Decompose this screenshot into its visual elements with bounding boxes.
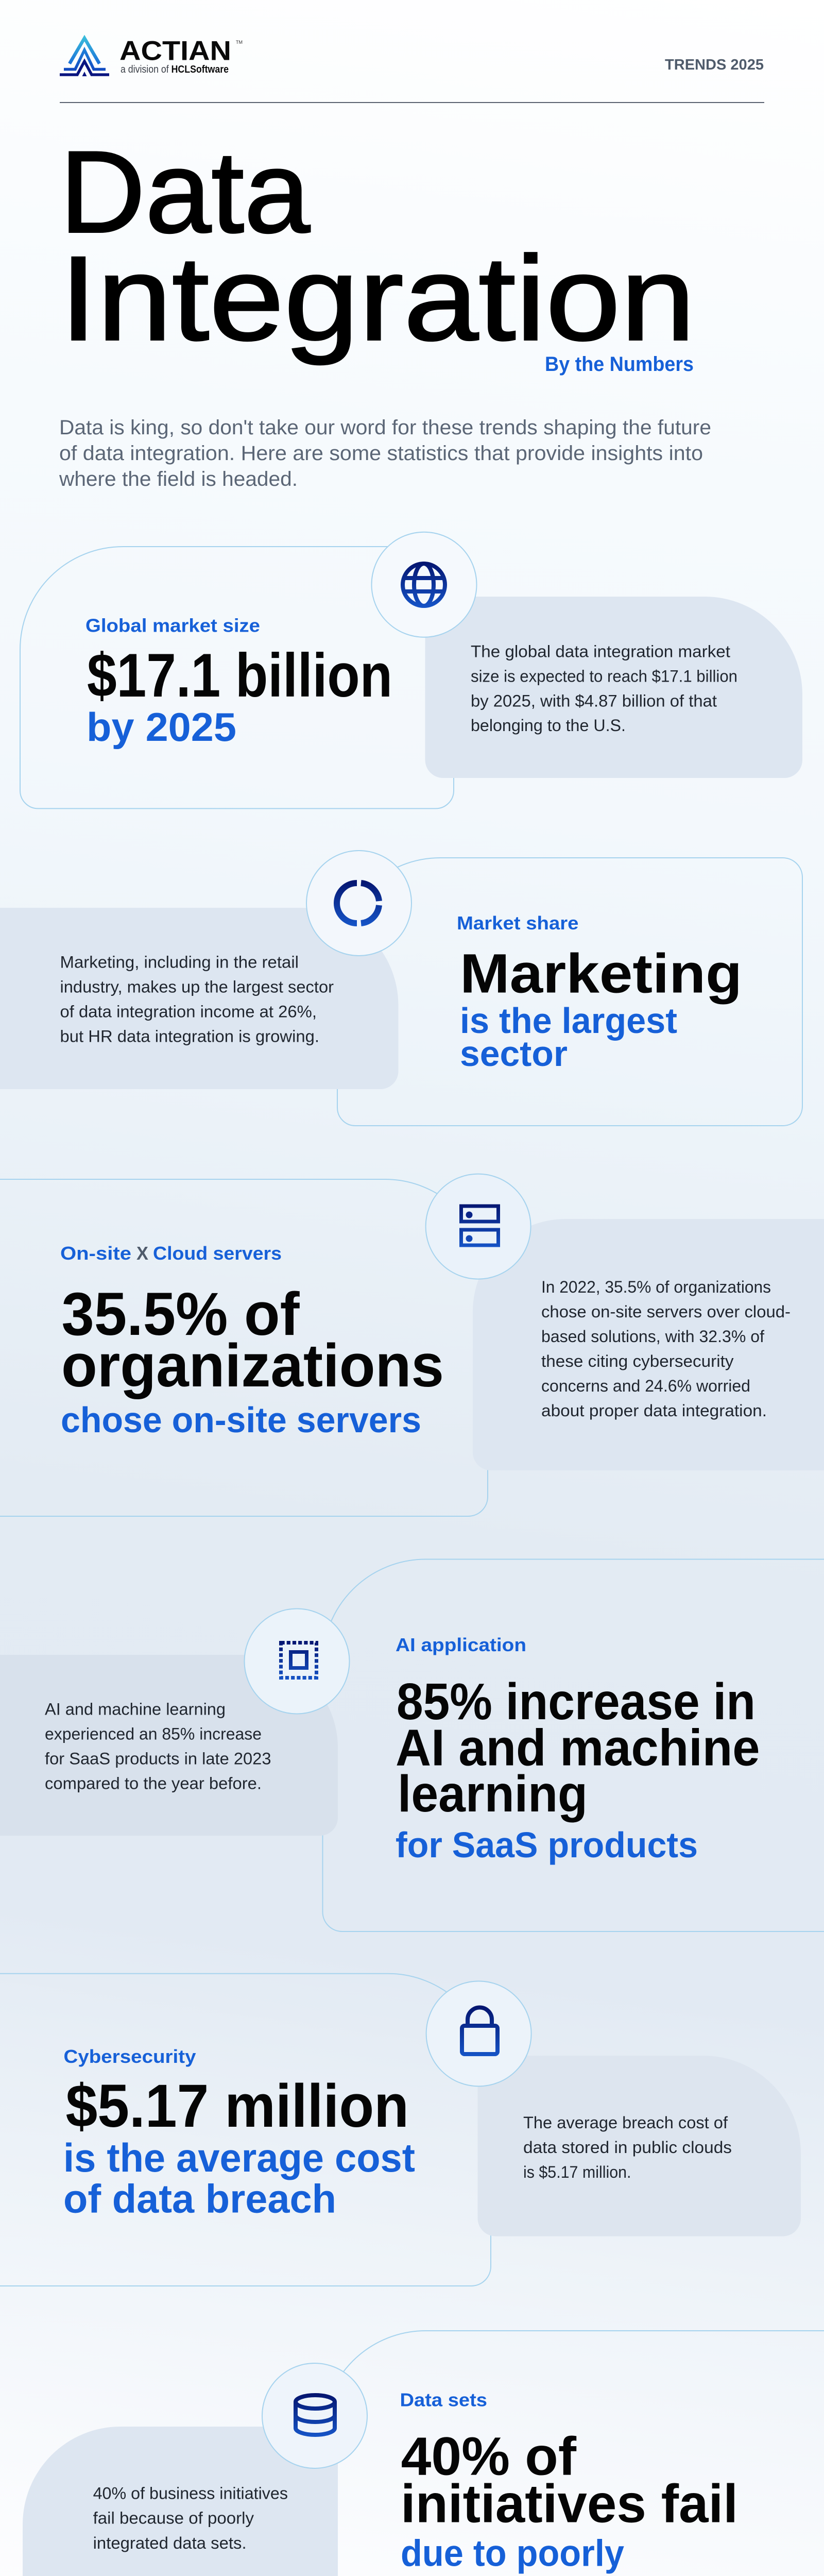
stat: AI and machine (396, 1719, 760, 1776)
stat: $17.1 billion (87, 641, 392, 710)
label (60, 1243, 282, 1264)
subtitle: By the Numbers (545, 353, 694, 376)
description: by 2025, with $4.87 billion of that (471, 691, 717, 710)
stat: 85% increase in (397, 1673, 756, 1731)
description: 40% of business initiatives (93, 2484, 288, 2503)
stat caption: chose on-site servers (61, 1400, 421, 1440)
stat (401, 2427, 738, 2534)
stat: learning (398, 1765, 588, 1823)
panel: on-site vs cloud servers (0, 1174, 824, 1516)
detail box (473, 1219, 824, 1470)
detail box (23, 2427, 338, 2576)
description: for SaaS products in late 2023 (45, 1750, 271, 1768)
panel: global market size (20, 532, 802, 808)
stat: organizations (61, 1332, 444, 1400)
label: Market share (457, 912, 579, 934)
description (45, 1700, 271, 1793)
icon: Actian triangle mark (60, 38, 109, 76)
label: AI application (396, 1634, 526, 1655)
intro text: where the field is headed. (59, 468, 298, 490)
description: In 2022, 35.5% of organizations (541, 1278, 771, 1296)
description: of data integration income at 26%, (60, 1003, 317, 1021)
description (523, 2113, 732, 2181)
division line: a division of HCLSoftware (121, 64, 229, 75)
header (60, 36, 764, 76)
description: size is expected to reach $17.1 billion (471, 667, 737, 685)
icon: server (426, 1174, 531, 1279)
icon: chip (244, 1608, 349, 1714)
description: concerns and 24.6% worried (541, 1377, 750, 1395)
description: chose on-site servers over cloud- (541, 1302, 791, 1321)
description: belonging to the U.S. (471, 716, 626, 735)
description: integrated data sets. (93, 2534, 247, 2552)
description: based solutions, with 32.3% of (541, 1327, 764, 1346)
stat caption: for SaaS products (396, 1825, 698, 1865)
description: AI and machine learning (45, 1700, 226, 1719)
label: Cloud servers (153, 1243, 282, 1264)
stat: 35.5% of (62, 1280, 300, 1348)
description: fail because of poorly (93, 2509, 254, 2528)
description: Marketing, including in the retail (60, 953, 299, 972)
stat caption: is the largest (460, 1001, 677, 1041)
panel: data sets (23, 2331, 824, 2576)
stat: 40% of (401, 2427, 577, 2487)
detail box (0, 1655, 338, 1836)
icon: padlock (426, 1981, 531, 2086)
stat (61, 1280, 444, 1400)
intro text (59, 416, 711, 490)
stat caption: sector (460, 1033, 568, 1074)
detail box (425, 597, 802, 778)
description: is $5.17 million. (523, 2163, 631, 2181)
intro text: Data is king, so don't take our word for these trends shaping the future (59, 416, 711, 439)
stat: initiatives fail (401, 2474, 738, 2534)
icon: globe (372, 532, 477, 637)
stat: $5.17 million (66, 2072, 409, 2140)
title line: Integration: Integration (60, 232, 695, 366)
detail box (0, 908, 399, 1089)
description (471, 642, 737, 735)
description: but HR data integration is growing. (60, 1027, 319, 1046)
panel: cybersecurity (0, 1974, 801, 2286)
stat: Marketing (460, 942, 742, 1005)
description: The average breach cost of (523, 2113, 728, 2132)
description: these citing cybersecurity (541, 1352, 733, 1370)
description: about proper data integration. (541, 1401, 767, 1420)
label: Global market size (85, 615, 260, 636)
description: industry, makes up the largest sector (60, 978, 334, 996)
description: The global data integration market (471, 642, 730, 660)
label: X (136, 1243, 148, 1264)
detail box (478, 2056, 801, 2236)
panel: market share (0, 851, 802, 1126)
description: compared to the year before. (45, 1774, 262, 1793)
intro text: of data integration. Here are some statistics that provide insights into (59, 442, 703, 465)
stat caption: of data breach (63, 2176, 336, 2222)
stat caption (63, 2135, 415, 2222)
icon: donut chart (306, 851, 411, 956)
description (93, 2484, 288, 2552)
stat caption: is the average cost (63, 2135, 415, 2180)
trademark: TM (236, 40, 243, 45)
label: Cybersecurity (64, 2046, 196, 2067)
panel: AI application (0, 1559, 824, 1931)
title line: Data: Data (60, 127, 310, 257)
stat caption (460, 1001, 677, 1074)
stat (396, 1673, 760, 1823)
description: data stored in public clouds (523, 2138, 732, 2157)
title (60, 127, 695, 376)
edition label: TRENDS 2025 (665, 57, 764, 73)
label: Data sets (400, 2389, 487, 2411)
stat caption: by 2025 (87, 704, 236, 750)
label: On-site (60, 1243, 131, 1264)
description (541, 1278, 791, 1420)
description (60, 953, 334, 1046)
logo: Actian (60, 36, 243, 76)
wordmark: ACTIAN (119, 36, 231, 66)
icon: database (262, 2363, 367, 2468)
description: experienced an 85% increase (45, 1725, 262, 1743)
stat caption: due to poorly (401, 2533, 624, 2574)
